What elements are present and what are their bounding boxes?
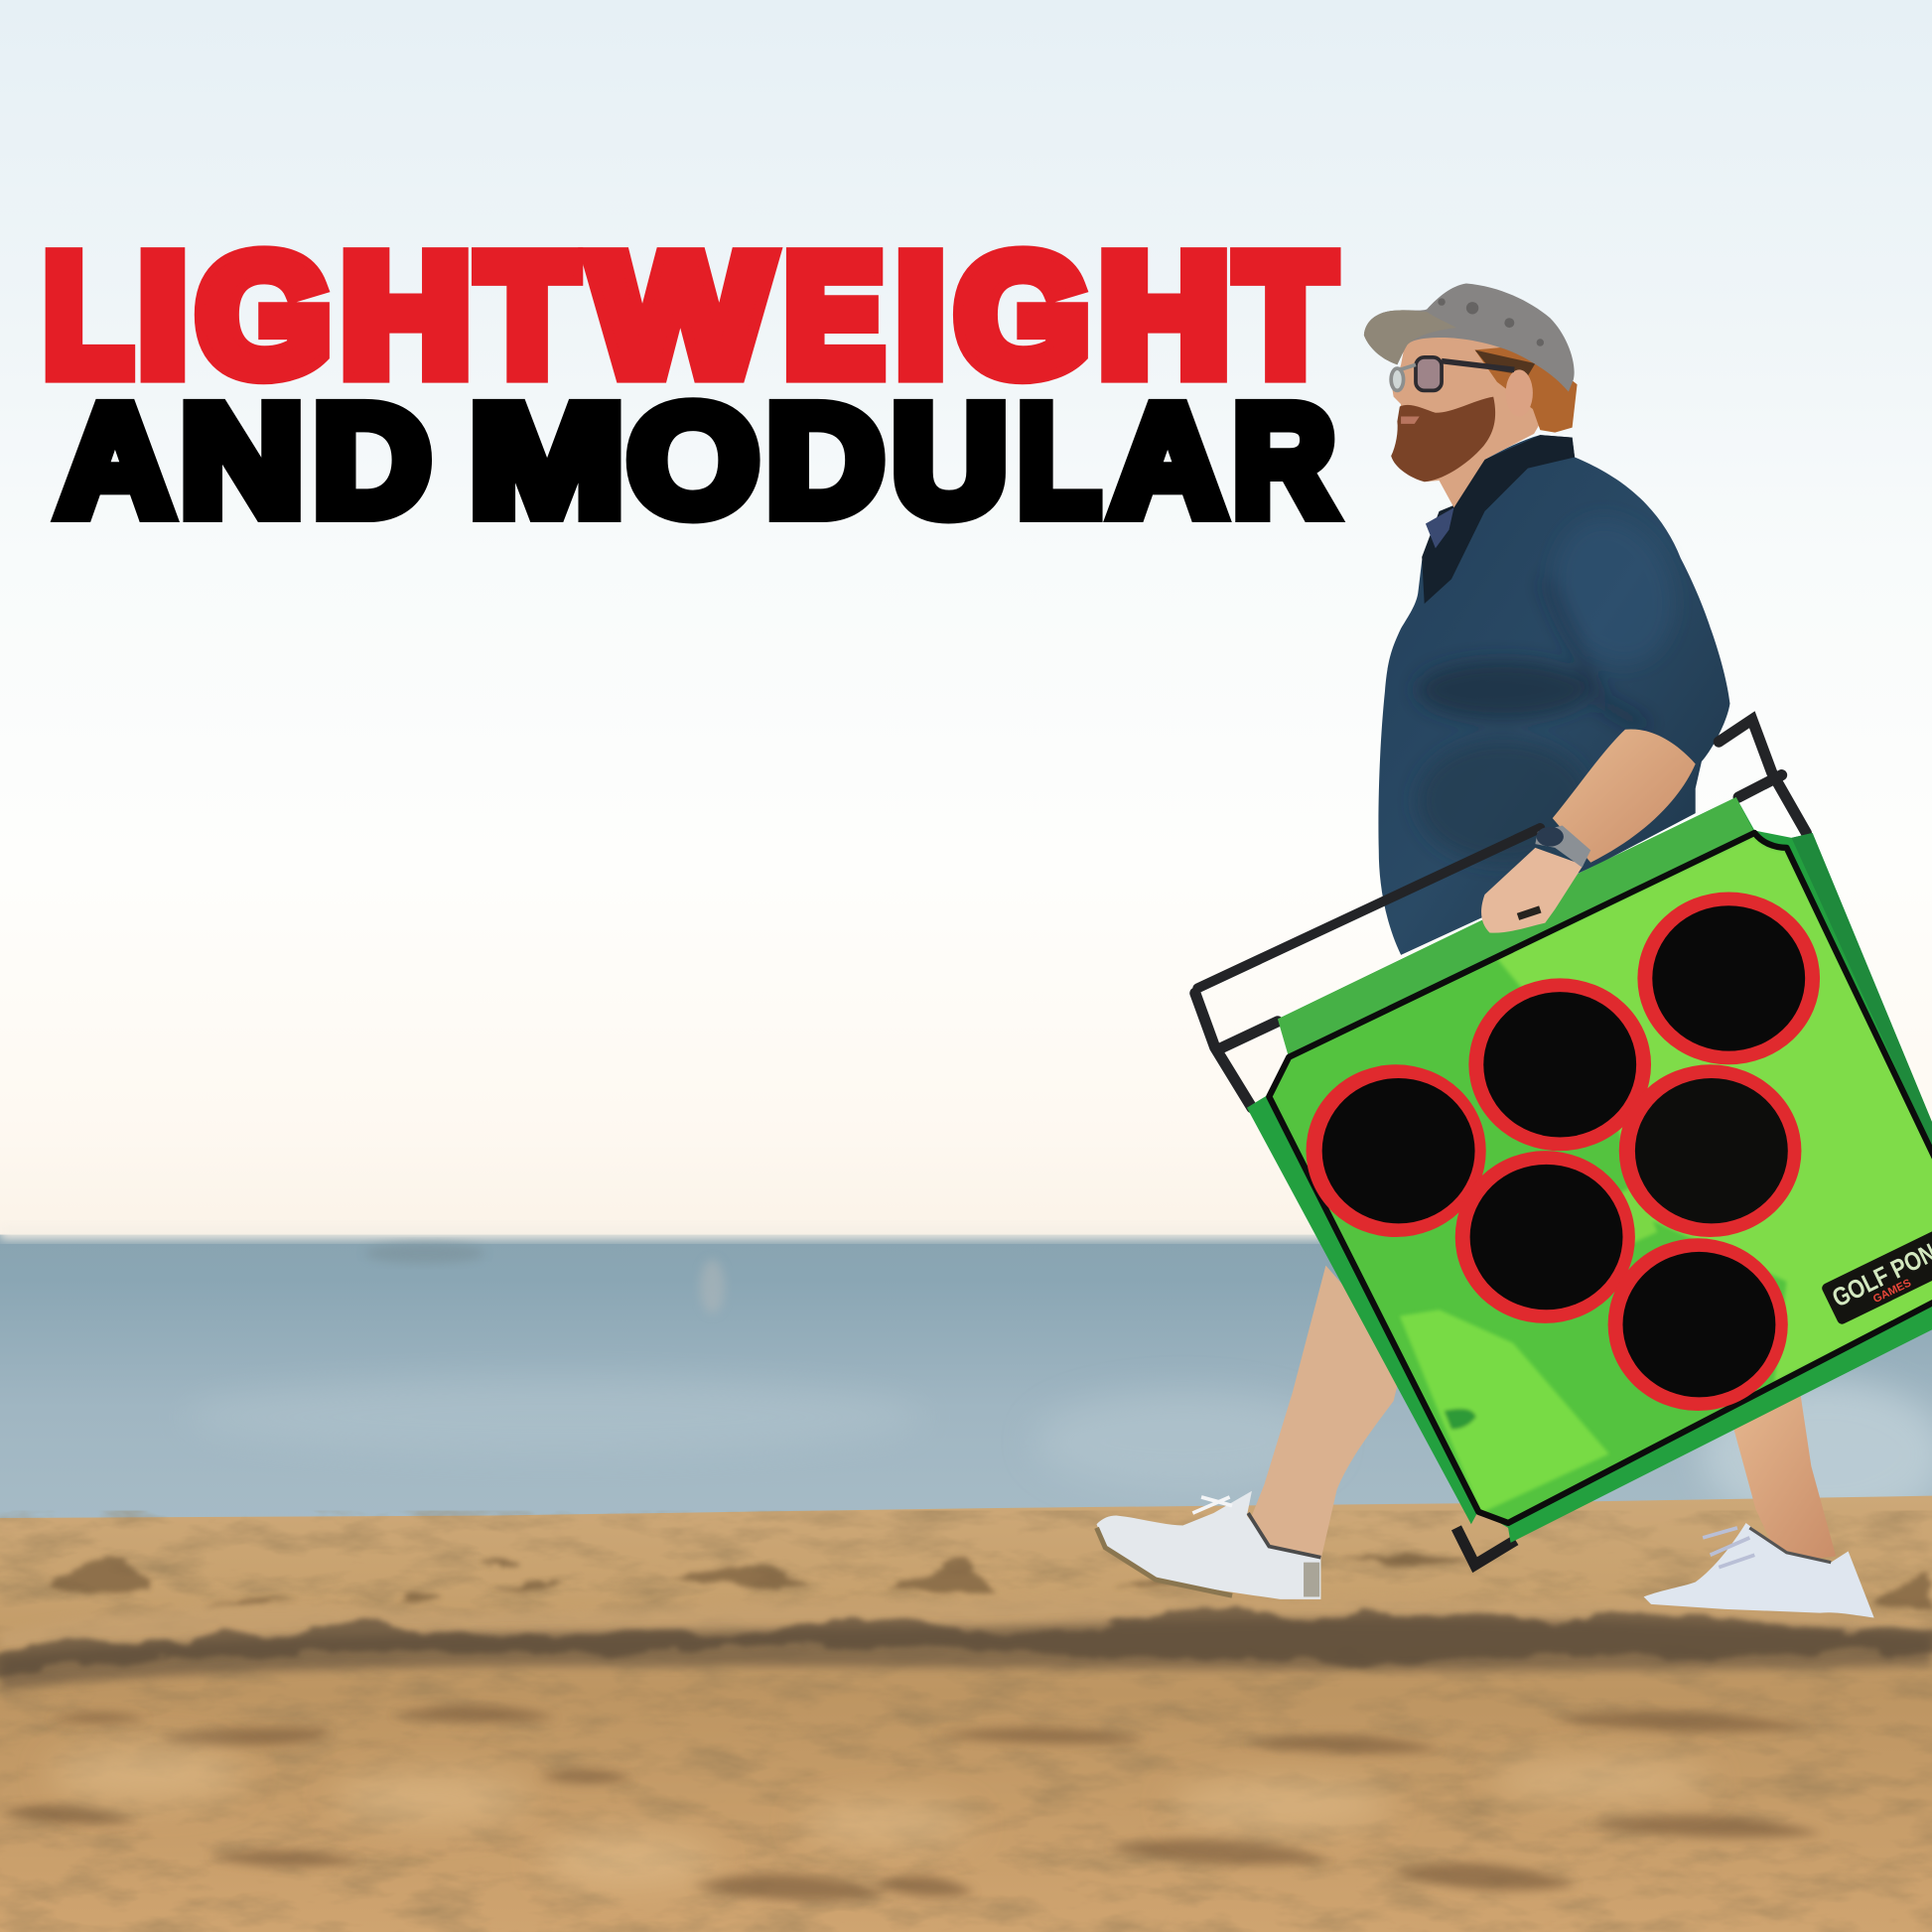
back leg [1724,1392,1836,1563]
headline line 1: G [198,221,330,409]
glasses [1391,357,1514,390]
shirt [1378,435,1729,955]
circle 1 [1307,1064,1486,1237]
golf pong board [1195,720,1932,1565]
shadow ridge [0,1609,1932,1678]
headline line 2: O [627,374,759,548]
headline line 1: I [897,221,944,409]
target circles [1307,893,1820,1411]
panel black seam [1269,833,1932,1523]
neck and face [1392,327,1550,507]
headline line 2: L [1018,374,1100,548]
sand crest [0,1597,1932,1651]
collar and placket [1422,435,1575,604]
top band [1278,797,1754,1057]
front leg [1252,1266,1405,1560]
headline line 1: G [956,221,1088,409]
man walking [1097,283,1874,1618]
shirt shading [1417,502,1693,863]
headline line 2: M [470,374,623,548]
sky background [0,0,1932,1238]
headline line 2: D [314,374,431,548]
beard [1391,397,1495,482]
bottom frame corner [1456,1528,1516,1565]
headline line 2: D [766,374,884,548]
logo badge: GAMES [1871,1277,1913,1306]
headline line 1: W [592,221,768,409]
lips [1401,416,1420,424]
headline line 2: R [1233,374,1335,548]
fabric outer band [1247,797,1932,1543]
cap [1364,283,1575,392]
blurred foreground patches [0,1706,1824,1900]
sea [0,1225,1932,1528]
circle 3 [1637,893,1820,1064]
circle 4 [1455,1151,1635,1323]
headline line 2: N [181,374,304,548]
panel lighting [1400,835,1932,1513]
green panel [1269,833,1932,1523]
pipe frame [1195,720,1806,1108]
forearm [1553,729,1696,863]
headline line 1: T [480,221,576,409]
headline line 1: E [785,221,883,409]
circle 6 [1608,1238,1788,1411]
ear and hair [1475,345,1578,433]
back shoe [1644,1523,1874,1618]
headline line 2: U [893,374,1007,548]
sand [0,1496,1932,1932]
headline line 1: T [1238,221,1333,409]
headline line 2: A [58,374,173,548]
headline line 1: H [1100,221,1228,409]
headline line 1: I [139,221,187,409]
soft ridge shadow [0,1618,1932,1691]
title: lightweight and modular [44,221,1335,548]
sand mounds far [48,1555,1932,1608]
headline line 2: A [1111,374,1224,548]
circle 2 [1468,978,1651,1151]
headline line 1: H [342,221,470,409]
right band shade [1792,833,1932,1235]
circle 5 [1619,1064,1801,1237]
hand gripping frame [1481,826,1590,933]
front shoe [1097,1491,1320,1599]
headline line 1: L [44,221,131,409]
wristwatch [1535,826,1590,868]
